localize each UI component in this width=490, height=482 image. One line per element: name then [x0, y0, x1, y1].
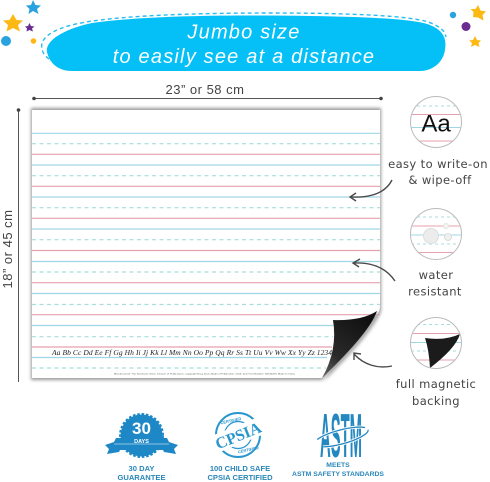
- ribbon: [105, 438, 178, 454]
- badge: ASTM: MEETS: [326, 462, 350, 469]
- arrow to board: write-on: [350, 180, 392, 201]
- badge: ASTM: [292, 402, 384, 478]
- icon: magnetic circle: [410, 317, 462, 369]
- label: water: resistant: [408, 284, 462, 298]
- label: write-on: & wipe-off: [408, 173, 472, 187]
- badge: CPSIA: [207, 413, 273, 482]
- banner: headline: [42, 13, 446, 71]
- label: magnetic: [396, 377, 476, 408]
- label: write-on: easy to write-on: [388, 157, 488, 171]
- sheet surface: [32, 110, 380, 378]
- badge: CPSIA: CERTIFIED: [237, 445, 259, 454]
- label: magnetic: backing: [412, 394, 460, 408]
- headline text: to easily see at a distance: [113, 46, 375, 68]
- badge: 30 day guarantee: 30: [132, 419, 151, 438]
- label: water: water: [419, 268, 453, 282]
- banner fill: [47, 16, 445, 71]
- badge: 30 day guarantee: DAYS: [134, 439, 149, 445]
- height dimension: [0, 108, 20, 382]
- curl shape: [322, 311, 377, 378]
- magnetic curl: [322, 311, 381, 381]
- sheet shadow: [31, 108, 381, 380]
- badge: ASTM: ASTM SAFETY STANDARDS: [292, 471, 384, 478]
- label: water: [408, 268, 462, 298]
- curl shadow: [324, 311, 381, 381]
- decorative stars and dots, left: [1, 0, 41, 46]
- arrow to board: water: [353, 259, 395, 281]
- water drops: [424, 228, 438, 244]
- seal: [120, 414, 162, 456]
- badge: 30 day guarantee: [105, 414, 178, 482]
- icon: write-on circle: Aa: [421, 111, 451, 138]
- badge: 30 day guarantee: 30 DAY: [129, 464, 154, 473]
- arrow to curl: [354, 353, 392, 367]
- label: write-on: [388, 157, 488, 187]
- badge: CPSIA: CPSIA CERTIFIED: [207, 473, 273, 482]
- fine print: Manufactured: The Scholastic Store, Division of Publications. Copyright Easy Draw, Made of Publication. 2016. Item Part Number: 58745209. Made In China: [114, 372, 296, 376]
- badge: 30 day guarantee: GUARANTEE: [117, 473, 166, 482]
- alphabet strip: Aa Bb Cc Dd Ee Ff Gg Hh Ii Jj Kk Ll Mm Nn Oo Pp Qq Rr Ss Tt Uu Vv Ww Xx Yy Zz 1234: [51, 348, 332, 357]
- icon: water circle: [410, 208, 462, 260]
- headline text: Jumbo size: [186, 22, 301, 44]
- ruled lines: [32, 133, 380, 368]
- width dimension: [32, 82, 383, 100]
- badge: CPSIA: CERTIFIED: [220, 416, 242, 425]
- badge: CPSIA: 100 CHILD SAFE: [210, 464, 270, 473]
- banner dashed outline: [42, 13, 446, 59]
- width dimension: 23” or 58 cm: [166, 82, 244, 97]
- height dimension: 18” or 45 cm: [0, 210, 15, 288]
- badge: CPSIA: CPSIA: [213, 419, 264, 453]
- whiteboard sheet: [31, 108, 381, 380]
- icon: write-on circle: [410, 96, 462, 148]
- decorative stars and dots, right: [450, 5, 486, 47]
- headline text: [113, 22, 375, 68]
- label: magnetic: full magnetic: [396, 377, 476, 391]
